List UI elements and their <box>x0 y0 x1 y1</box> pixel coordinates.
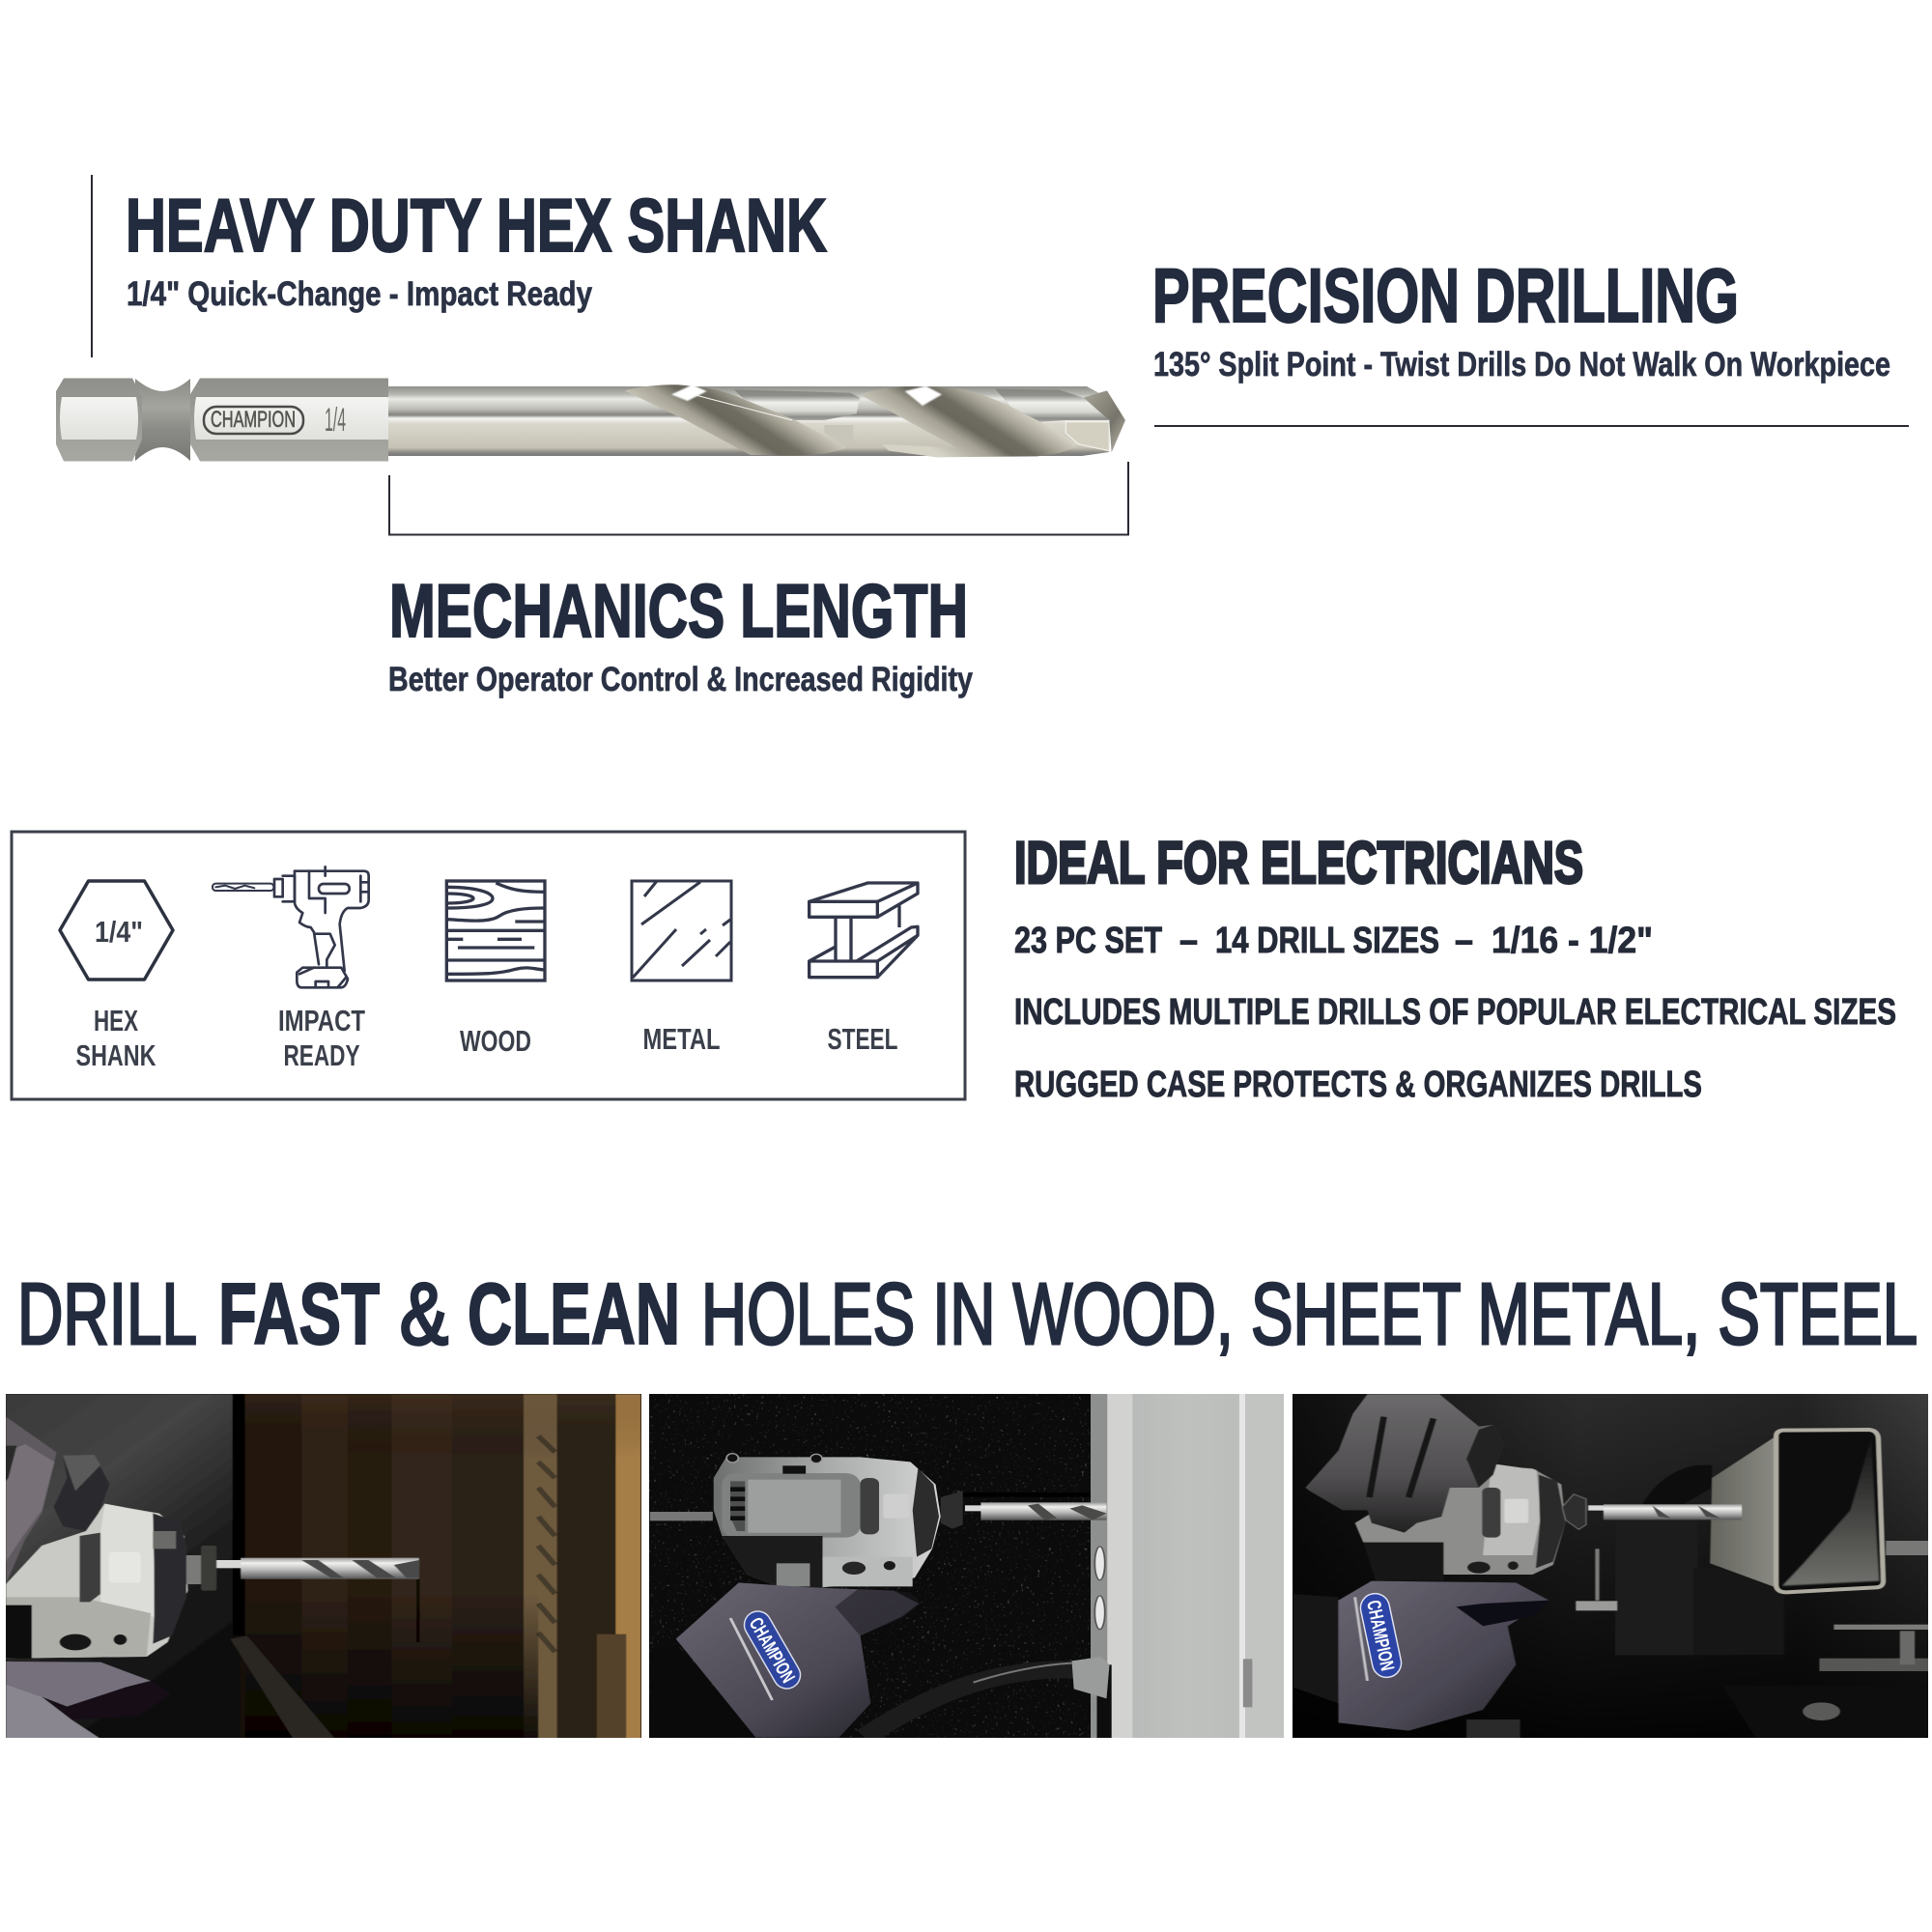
icon: metal <box>632 881 731 1056</box>
logo: champion glove badge: CHAMPION <box>1362 1599 1398 1673</box>
callout: mechanics length: Better Operator Control & Increased Rigidity <box>388 661 973 698</box>
logo: champion etching: CHAMPION <box>211 407 296 433</box>
callout: precision drilling: PRECISION DRILLING <box>1152 252 1739 338</box>
icon: steel beam <box>810 883 918 1056</box>
headline: & <box>400 1266 448 1363</box>
icon: metal: METAL <box>643 1022 721 1056</box>
icon: hex shank <box>60 881 173 1072</box>
icon: impact driver: READY <box>284 1038 360 1072</box>
icon: wood <box>446 881 545 1058</box>
callout: precision drilling <box>1152 252 1909 427</box>
text block: ideal for electricians: – <box>1455 921 1473 961</box>
text block: ideal for electricians: 1/16 - 1/2" <box>1492 921 1653 961</box>
icon: hex shank: SHANK <box>75 1038 156 1072</box>
drill neck groove <box>135 379 190 461</box>
text block: ideal for electricians: 14 DRILL SIZES <box>1215 921 1439 961</box>
text block: ideal for electricians: RUGGED CASE PROTECTS & ORGANIZES DRILLS <box>1014 1065 1702 1105</box>
text block: ideal for electricians: 23 PC SET <box>1014 921 1162 961</box>
logo: champion glove badge: CHAMPION <box>745 1614 799 1687</box>
headline: DRILL <box>17 1266 197 1363</box>
logo: champion glove badge <box>744 1610 802 1690</box>
drill bit product image: 1/4 <box>325 402 346 439</box>
headline: FAST <box>218 1266 380 1363</box>
logo: champion glove badge <box>1360 1592 1403 1679</box>
icon: hex shank: 1/4" <box>95 915 143 949</box>
panel: feature icons <box>12 832 965 1099</box>
photo: drilling into wood <box>6 1394 641 1739</box>
icon: wood: WOOD <box>460 1024 531 1058</box>
photo: drilling into steel tube <box>1293 1394 1929 1739</box>
icon: hex shank: HEX <box>94 1004 138 1037</box>
headline <box>17 1266 1918 1363</box>
callout: mechanics length: MECHANICS LENGTH <box>389 568 968 653</box>
callout: heavy duty hex shank: HEAVY DUTY HEX SHANK <box>126 183 827 268</box>
icon: steel beam: STEEL <box>827 1022 898 1056</box>
callout: heavy duty hex shank: 1/4" Quick-Change - Impact Ready <box>127 275 592 313</box>
text block: ideal for electricians <box>1014 830 1896 1105</box>
text block: ideal for electricians: – <box>1179 921 1198 961</box>
photo: drilling into electrical panel <box>649 1394 1284 1739</box>
icon: impact driver <box>213 867 369 1072</box>
callout: heavy duty hex shank <box>91 175 827 357</box>
icon: impact driver: IMPACT <box>278 1004 365 1037</box>
text block: ideal for electricians: IDEAL FOR ELECTRICIANS <box>1014 830 1583 895</box>
callout: mechanics length <box>388 568 973 698</box>
drill bit product image <box>56 379 1125 462</box>
headline: CLEAN <box>468 1266 680 1363</box>
logo: champion etching <box>204 402 346 439</box>
bracket: mechanics length <box>389 462 1128 535</box>
